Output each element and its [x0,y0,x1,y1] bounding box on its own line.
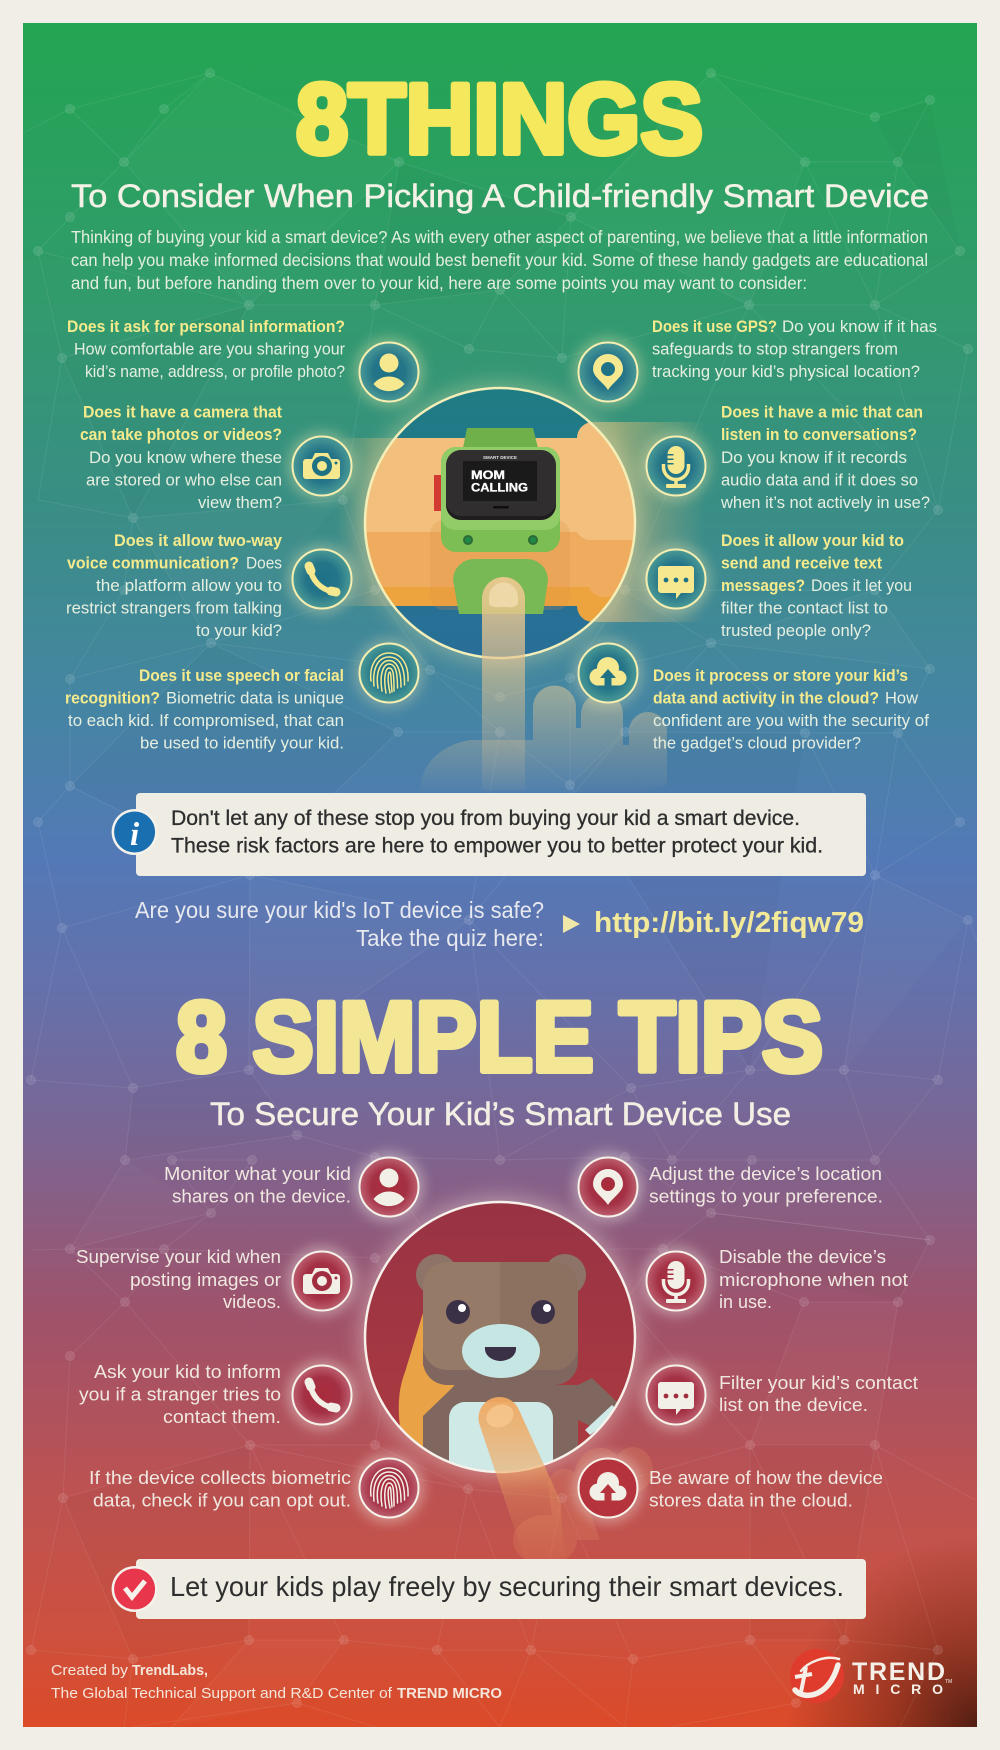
text: two-way voice: voice communication? [67,554,239,572]
lower strap [453,559,548,614]
bear muzzle [462,1324,540,1378]
text: cloud: confident are you with the security of [653,711,929,730]
callout: info: Don't let any of these stop you from buying your kid a smart device. [171,806,800,830]
tip: supervise: videos. [223,1292,281,1312]
illustration: teddy bear [360,1197,653,1565]
text: GPS: Does it use GPS? [652,317,777,336]
tip: cloud: Be aware of how the device [649,1468,883,1488]
tip: microphone: microphone when not [719,1270,908,1290]
text: mic [720,403,930,512]
logo: Trend Micro: TM [945,1679,952,1685]
text: mic: audio data and if it does so [721,470,918,490]
text: text messages: send and receive text [721,554,882,572]
tip: monitor [164,1164,351,1207]
watch strap shadow [430,520,570,610]
hand fingers [513,1447,653,1565]
red button [434,475,441,511]
bear belly [449,1402,553,1471]
tip: ask: you if a stranger tries to [79,1384,281,1404]
text: mic: Do you know if it records [721,448,907,467]
text: text messages [721,531,912,640]
tip: location [649,1164,883,1207]
icon: chat bubble (bottom) [641,1360,711,1430]
credits: Created by [51,1662,129,1679]
big circle ring [365,388,635,658]
strap holes [463,535,538,545]
bear head [423,1348,578,1385]
tip: contacts: Filter your kid’s contact [719,1373,918,1393]
credits: TrendLabs, [132,1662,208,1679]
cuff [585,1405,614,1435]
text: two-way voice: restrict strangers from talking [66,598,282,618]
text: speech or facial recognition: be used to identify your kid. [140,734,344,752]
credits [51,1662,502,1702]
bear eyes [446,1300,555,1324]
screen text: CALLING [471,480,528,494]
watch screen [446,451,556,520]
text: two-way voice: Does it allow two-way [114,531,283,550]
intro paragraph: and fun, but before handing them over to your kid, here are some points you may want to consider: [71,273,807,293]
icon: fingerprint (bottom) [354,1453,424,1523]
title: 8 SIMPLE TIPS: 8 SIMPLE TIPS [176,981,823,1092]
big circle glow [360,383,640,663]
icon: fingerprint (top) [354,638,424,708]
tip: contacts: list on the device. [719,1395,868,1415]
text: personal information: kid’s name, address, or profile photo? [85,362,345,381]
watch body [441,447,560,552]
intro paragraph: Thinking of buying your kid a smart device? As with every other aspect of parenting, we believe that a little information [71,227,928,247]
text: GPS: Do you know if it has [782,317,937,336]
tip: microphone: in use. [719,1292,772,1312]
text: text messages: Does it let you [811,576,912,595]
text: personal information: How comfortable are you sharing your [74,340,345,358]
text: cloud [653,666,929,752]
icon: check circle [112,1566,158,1612]
text: text messages: trusted people only? [721,621,871,640]
screen text [471,468,528,494]
text: text messages: filter the contact list to [721,598,888,618]
icon: cloud (bottom) [573,1453,643,1523]
intro paragraph: can help you make informed decisions that would best benefit your kid. Some of these handy gadgets are educational [71,250,928,270]
title: 8 THINGS: 8THINGS [296,63,703,174]
icon: microphone (bottom) [641,1246,711,1316]
tip: supervise [76,1247,281,1312]
icon: cloud (top) [573,638,643,708]
big circle glow [360,1197,640,1477]
quiz link: http://bit.ly/2fiqw79 [594,907,864,939]
bear body and arm [423,1378,617,1460]
text: two-way voice: to your kid? [196,621,282,640]
text: cloud: the gadget’s cloud provider? [653,734,861,752]
callout: info: These risk factors are here to empower you to better protect your kid. [171,834,823,858]
text: two-way voice [66,531,283,640]
arm fade outside circle [335,422,705,622]
text: personal information: Does it ask for personal information? [67,317,345,336]
quiz prompt [135,897,544,951]
text: GPS: safeguards to stop strangers from [652,340,898,358]
callout: info [112,793,866,876]
text: camera: view them? [198,493,282,512]
icon: camera (bottom) [287,1246,357,1316]
text: speech or facial recognition: Biometric data is unique [166,688,344,708]
tip: supervise: posting images or [130,1270,281,1290]
big circle fill [365,1202,635,1472]
text: camera: can take photos or videos? [80,425,282,444]
text: personal information [67,317,345,381]
text: GPS [652,317,937,381]
illustration: watch on wrist [335,383,705,792]
tip: contacts [719,1373,918,1415]
icon: info circle: i [130,817,140,853]
fingernail [489,582,518,607]
bear ears [416,1254,586,1292]
text: two-way voice: the platform allow you to [96,576,282,595]
callout: check [112,1559,866,1619]
bear mouth [485,1347,516,1361]
tip: ask [79,1362,281,1427]
tip: cloud [649,1468,883,1510]
icon: camera (top) [287,431,357,501]
text: cloud: data and activity in the cloud? [653,688,879,708]
screen label: SMART DEVICE [483,455,517,460]
text: mic: Does it have a mic that can [721,403,923,422]
icon: location pin (top) [573,337,643,407]
text: GPS: tracking your kid’s physical location? [652,362,920,381]
big circle ring [365,1202,635,1472]
icon: person (bottom) [354,1152,424,1222]
icon: phone (bottom) [287,1360,357,1430]
subtitle 2: To Secure Your Kid’s Smart Device Use [210,1096,791,1132]
icon: phone (top) [287,544,357,614]
tip: supervise: Supervise your kid when [76,1247,281,1267]
pointing finger and hand [482,577,525,790]
screen text: MOM [471,468,505,482]
logo: Trend Micro: MICRO [853,1681,943,1697]
text: camera: Do you know where these [89,448,282,467]
quiz prompt: Are you sure your kid's IoT device is safe? [135,897,544,923]
text: speech or facial recognition: recognition? [65,688,160,708]
credits: The Global Technical Support and R&D Center of [51,1685,393,1702]
tip: monitor: Monitor what your kid [164,1164,351,1184]
icon: location pin (bottom) [573,1152,643,1222]
text: camera: are stored or who else can [86,470,282,490]
intro paragraph [71,227,928,293]
tip: biometric: data, check if you can opt out. [93,1490,351,1510]
text: cloud: How [885,688,919,708]
tip: biometric [89,1468,351,1510]
tip: monitor: shares on the device. [172,1187,351,1207]
text: text messages: messages? [721,576,805,595]
text: text messages: Does it allow your kid to [721,531,904,550]
big circle fill [365,388,635,658]
callout: check: Let your kids play freely by securing their smart devices. [170,1571,844,1602]
logo: Trend Micro: TREND [852,1658,945,1686]
quiz prompt: Take the quiz here: [356,925,544,951]
icon: person (top) [354,337,424,407]
fingernail [483,1401,517,1431]
text: mic: when it’s not actively in use? [720,493,930,512]
tip: microphone: Disable the device’s [719,1247,886,1267]
text: speech or facial recognition [65,666,344,752]
tip: ask: contact them. [163,1407,281,1427]
tip: location: settings to your preference. [649,1187,883,1207]
tip: location: Adjust the device’s location [649,1164,882,1184]
text: cloud: Does it process or store your kid’s [653,666,908,685]
pointing finger [478,1397,565,1560]
text: speech or facial recognition: to each kid. If compromised, that can [68,711,344,730]
text: speech or facial recognition: Does it use speech or facial [139,666,344,685]
tip: ask: Ask your kid to inform [94,1362,281,1382]
text: mic: listen in to conversations? [721,425,917,444]
icon: chat bubble (top) [641,544,711,614]
icon: microphone (top) [641,431,711,501]
tip: microphone [719,1247,908,1312]
tip: cloud: stores data in the cloud. [649,1490,853,1510]
wrist band and hand [360,422,650,622]
text: camera [80,403,282,512]
icon: info circle [112,809,158,855]
watch top strap [463,428,538,448]
logo: Trend Micro [790,1649,952,1703]
text: camera: Does it have a camera that [83,403,282,422]
tip: biometric: If the device collects biometric [89,1468,351,1488]
text: two-way voice: Does [246,554,282,572]
arrow [563,915,580,933]
orange hand [399,1313,456,1448]
screen button [493,506,509,508]
subtitle: To Consider When Picking A Child-friendly Smart Device [71,178,929,214]
credits: TREND MICRO [397,1685,502,1702]
